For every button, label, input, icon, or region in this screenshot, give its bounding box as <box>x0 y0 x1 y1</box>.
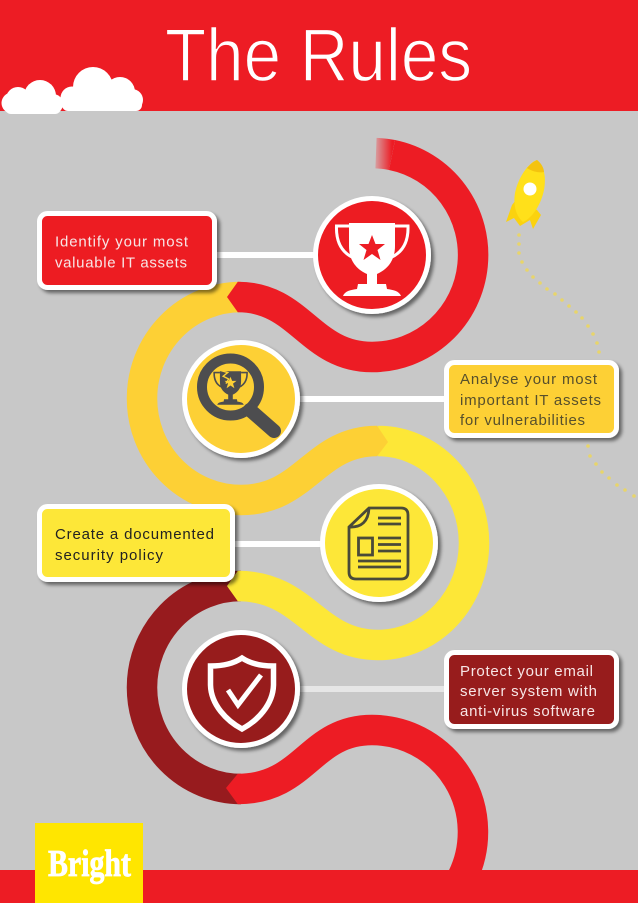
step 2: callout: for vulnerabilities <box>460 412 585 429</box>
header band <box>0 0 638 111</box>
logo: Bright <box>48 843 131 885</box>
step 3: document badge <box>322 486 436 600</box>
road segment: yellow <box>227 441 474 645</box>
footer band <box>0 870 638 903</box>
step 2: callout: important IT assets <box>460 392 601 409</box>
step 4: callout <box>446 652 616 726</box>
step 2: callout: Analyse your most <box>460 371 598 388</box>
icon: rocket <box>506 160 545 229</box>
step 3: callout: Create a documented <box>55 526 214 543</box>
icon: clouds <box>2 67 143 114</box>
step 1: trophy badge <box>316 198 428 312</box>
step 4: callout: anti-virus software <box>460 703 595 720</box>
road segment: dark red <box>142 586 241 789</box>
step 1: callout <box>40 214 214 288</box>
step 1: callout: Identify your most <box>55 234 189 250</box>
title: The Rules <box>165 13 472 97</box>
road segment: red upper <box>227 153 473 357</box>
winding road <box>142 153 474 877</box>
logo <box>35 823 143 903</box>
dotted rocket trail <box>517 233 636 498</box>
step 2: callout <box>446 362 616 436</box>
road segment: orange <box>142 297 388 500</box>
step 4: shield badge <box>184 632 298 746</box>
step 1: callout: valuable IT assets <box>55 254 187 272</box>
step 3: callout <box>40 506 232 580</box>
step 2: magnifier badge <box>184 342 298 456</box>
step 4: callout: server system with <box>460 683 597 700</box>
connector lines <box>214 252 446 692</box>
road segment: red lower <box>226 730 473 877</box>
step 3: callout: security policy <box>55 547 164 564</box>
step 4: callout: Protect your email <box>460 663 593 680</box>
